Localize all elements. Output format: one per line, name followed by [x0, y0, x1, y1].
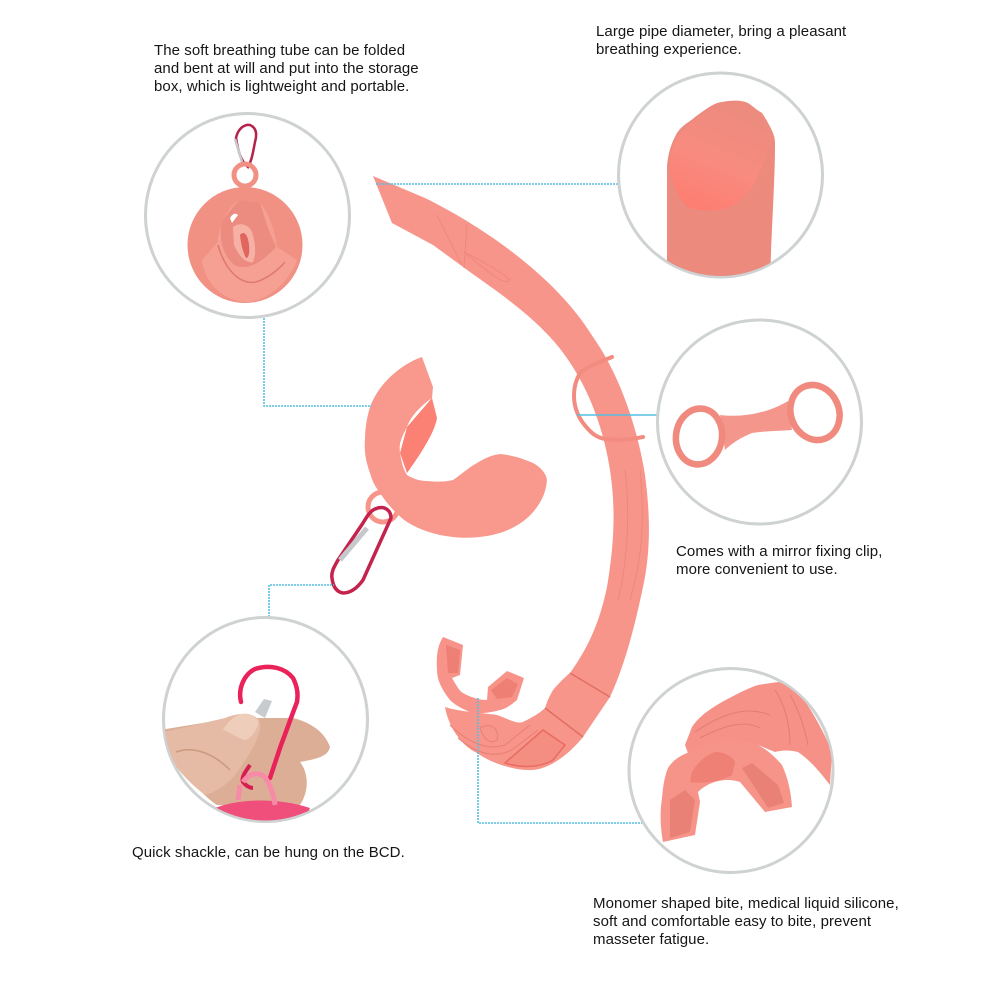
circle: bite — [629, 668, 833, 872]
caption: pipe diameter: breathing experience. — [596, 41, 742, 58]
circle: shackle in hand — [160, 618, 368, 830]
caption: soft tube: and bent at will and put into the storage — [154, 60, 419, 77]
caption: bite: soft and comfortable easy to bite, prevent — [593, 913, 872, 930]
mouthpiece — [332, 357, 547, 593]
caption: bite: masseter fatigue. — [593, 931, 709, 948]
loop — [234, 164, 256, 186]
mouthpiece loop — [368, 492, 398, 522]
caption: pipe diameter: Large pipe diameter, bring a pleasant — [596, 23, 846, 40]
seams and grip panel — [545, 673, 610, 737]
caption: shackle: Quick shackle, can be hung on the BCD. — [132, 844, 405, 861]
folded ball — [188, 187, 302, 303]
caption: clip: more convenient to use. — [676, 561, 838, 578]
caption: bite: Monomer shaped bite, medical liquid silicone, — [593, 895, 899, 912]
connector lines — [264, 184, 658, 823]
circle: fixing clip — [658, 320, 862, 524]
bite flanges — [437, 637, 524, 713]
circle: pipe opening — [618, 73, 822, 280]
carabiner — [332, 508, 391, 593]
carabiner — [236, 125, 256, 167]
caption: soft tube: box, which is lightweight and portable. — [154, 78, 409, 95]
circle: folded tube — [146, 114, 350, 318]
caption: clip: Comes with a mirror fixing clip, — [676, 543, 882, 560]
snorkel tube — [373, 176, 649, 770]
caption: soft tube: The soft breathing tube can be folded — [154, 42, 405, 59]
clip ring on tube — [574, 357, 643, 440]
